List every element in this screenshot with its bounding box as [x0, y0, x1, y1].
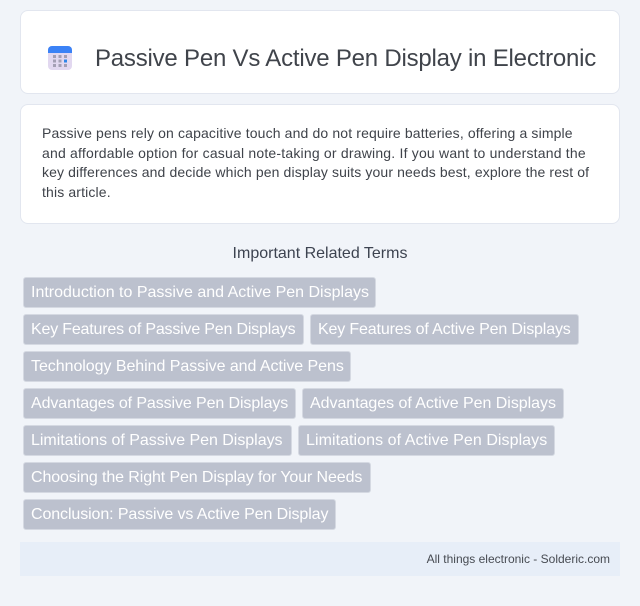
chip: Advantages of Passive Pen Displays [31, 395, 288, 412]
chip: Introduction to Passive and Active Pen Displays [31, 284, 369, 301]
intro paragraph: key differences and decide which pen display suits your needs best, explore the rest of [42, 164, 589, 180]
chip [302, 388, 564, 419]
section heading: Important Related Terms [233, 245, 407, 262]
chip: Advantages of Active Pen Displays [310, 395, 556, 412]
title: Passive Pen Vs Active Pen Display in Electronic [95, 45, 596, 72]
footer bar [20, 542, 620, 576]
intro paragraph: Passive pens rely on capacitive touch and do not require batteries, offering a simple [42, 125, 573, 141]
intro text panel [20, 104, 620, 224]
chip [23, 388, 296, 419]
intro paragraph: and affordable option for casual note-taking or drawing. If you want to understand the [42, 145, 586, 161]
intro paragraph: this article. [42, 184, 111, 200]
chip: Conclusion: Passive vs Active Pen Display [31, 506, 328, 523]
related terms chips [23, 277, 579, 530]
chip [23, 277, 376, 308]
chip [23, 425, 292, 456]
intro paragraph [42, 125, 590, 200]
chip: Technology Behind Passive and Active Pens [31, 358, 344, 375]
chip: Key Features of Passive Pen Displays [31, 321, 295, 338]
chip [298, 425, 555, 456]
footer credit: All things electronic - Solderic.com [427, 552, 610, 566]
chip [23, 499, 336, 530]
chip: Limitations of Active Pen Displays [306, 432, 547, 449]
chip: Choosing the Right Pen Display for Your Needs [31, 469, 362, 486]
chip [23, 314, 304, 345]
chip [23, 462, 371, 493]
header card [20, 10, 620, 94]
chip [23, 351, 351, 382]
chip: Key Features of Active Pen Displays [318, 321, 571, 338]
chip [310, 314, 579, 345]
chip: Limitations of Passive Pen Displays [31, 432, 283, 449]
icon: calendar [48, 46, 72, 70]
